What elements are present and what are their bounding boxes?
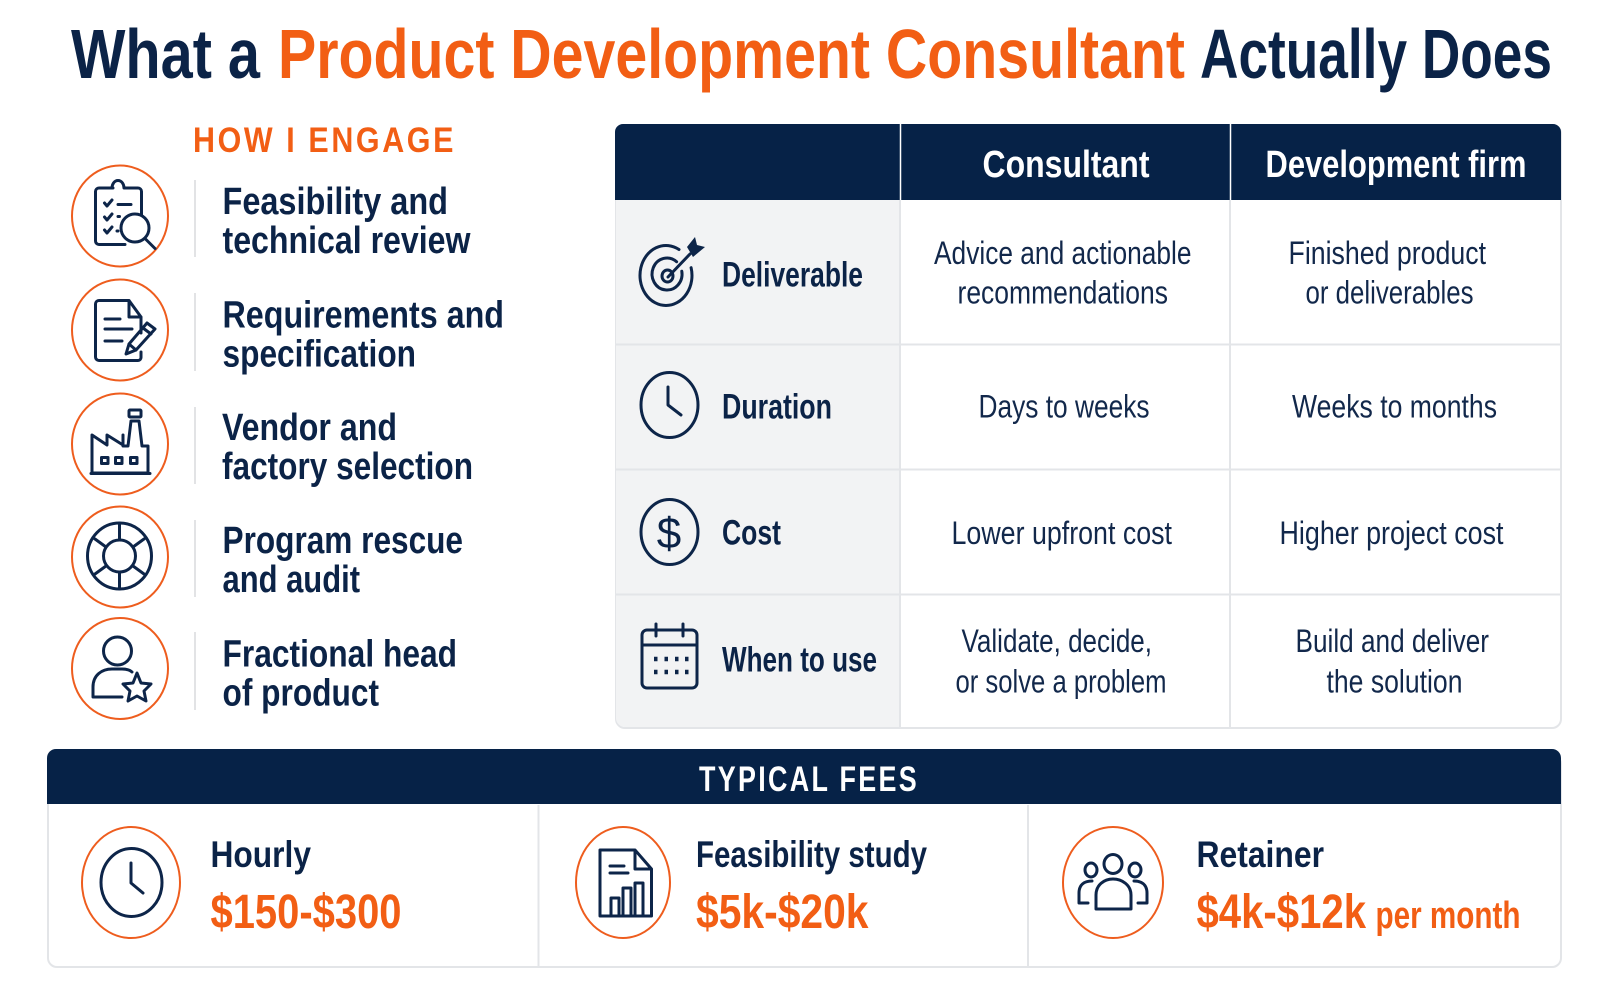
row: duration: Duration [722,388,832,426]
row: cost: Lower upfront cost [952,515,1172,551]
divider [194,520,196,597]
text: of product [222,672,379,714]
row: when to use: Build and deliver [1296,623,1489,659]
text [222,407,473,488]
divider [194,632,196,710]
item: vendor and factory selection [72,394,473,494]
divider [194,407,196,484]
text: factory selection [222,446,473,488]
fee: retainer: Retainer [1196,834,1324,875]
row: deliverable [640,235,1486,310]
comparison table [615,124,1561,728]
fee: hourly [82,827,402,939]
row: cost: Cost [722,514,781,552]
row: deliverable: Deliverable [722,256,863,294]
row: deliverable: Advice and actionable [934,235,1192,271]
row: when to use: the solution [1326,664,1462,700]
icon: clipboard with magnifier [72,166,168,266]
fee: retainer: per month [1376,895,1520,937]
icon: dollar [641,500,698,564]
icon: life ring [72,506,168,608]
fee: feasibility study [576,827,927,939]
panel: how I engage [72,121,504,719]
fee: retainer: $4k-$12k [1196,886,1366,939]
heading: how I engage: HOW I ENGAGE [193,121,456,160]
row: deliverable: recommendations [958,274,1168,310]
icon: calendar [642,624,697,688]
table header [615,124,1561,200]
icon: clock [641,372,698,438]
text [222,181,471,262]
icon: document with pencil [72,280,168,380]
row: cost: Higher project cost [1280,515,1504,551]
icon: clock [82,827,180,938]
panel: typical fees [47,749,1561,967]
text [222,520,463,601]
row: deliverable: Finished product [1288,235,1486,271]
icon: target with arrow [640,237,705,305]
fee: hourly: $150-$300 [210,886,402,939]
row: duration [641,372,1497,438]
text: Fractional head [222,634,457,676]
item: feasibility and technical review [72,166,471,266]
row: when to use: Validate, decide, [962,623,1152,659]
text [222,294,504,376]
icon: dollar: $ [657,509,681,558]
item: program rescue and audit [72,506,463,608]
fee: hourly: Hourly [210,834,311,875]
text: Program rescue [222,520,463,562]
divider [194,293,196,371]
fees header [47,749,1561,804]
item: requirements and specification [72,280,504,380]
text: Vendor and [222,407,397,449]
icon: factory [72,394,168,494]
text: technical review [222,220,471,262]
icon: people [1063,827,1163,938]
table header: Consultant [982,144,1150,186]
text: specification [222,334,416,376]
icon: document with chart [576,827,670,938]
divider [194,180,196,257]
text [222,634,457,714]
row: when to use: or solve a problem [956,664,1166,700]
row: deliverable: or deliverables [1306,274,1474,310]
row: when to use: When to use [722,640,877,680]
row: when to use [642,623,1489,700]
title: What a [71,15,261,93]
text: and audit [222,559,360,601]
item: fractional head of product [72,618,457,719]
text: Requirements and [222,294,504,336]
text: Feasibility and [222,181,448,223]
fee: feasibility study: Feasibility study [696,834,927,875]
title: Product Development Consultant [278,15,1185,93]
table header: Development firm [1266,144,1526,186]
row: duration: Weeks to months [1292,388,1497,424]
icon: person with star [72,618,168,719]
fee: retainer [1063,827,1520,939]
row: cost [641,500,1504,564]
row: duration: Days to weeks [978,388,1150,424]
fee: feasibility study: $5k-$20k [696,886,869,939]
fees header: TYPICAL FEES [699,760,919,799]
